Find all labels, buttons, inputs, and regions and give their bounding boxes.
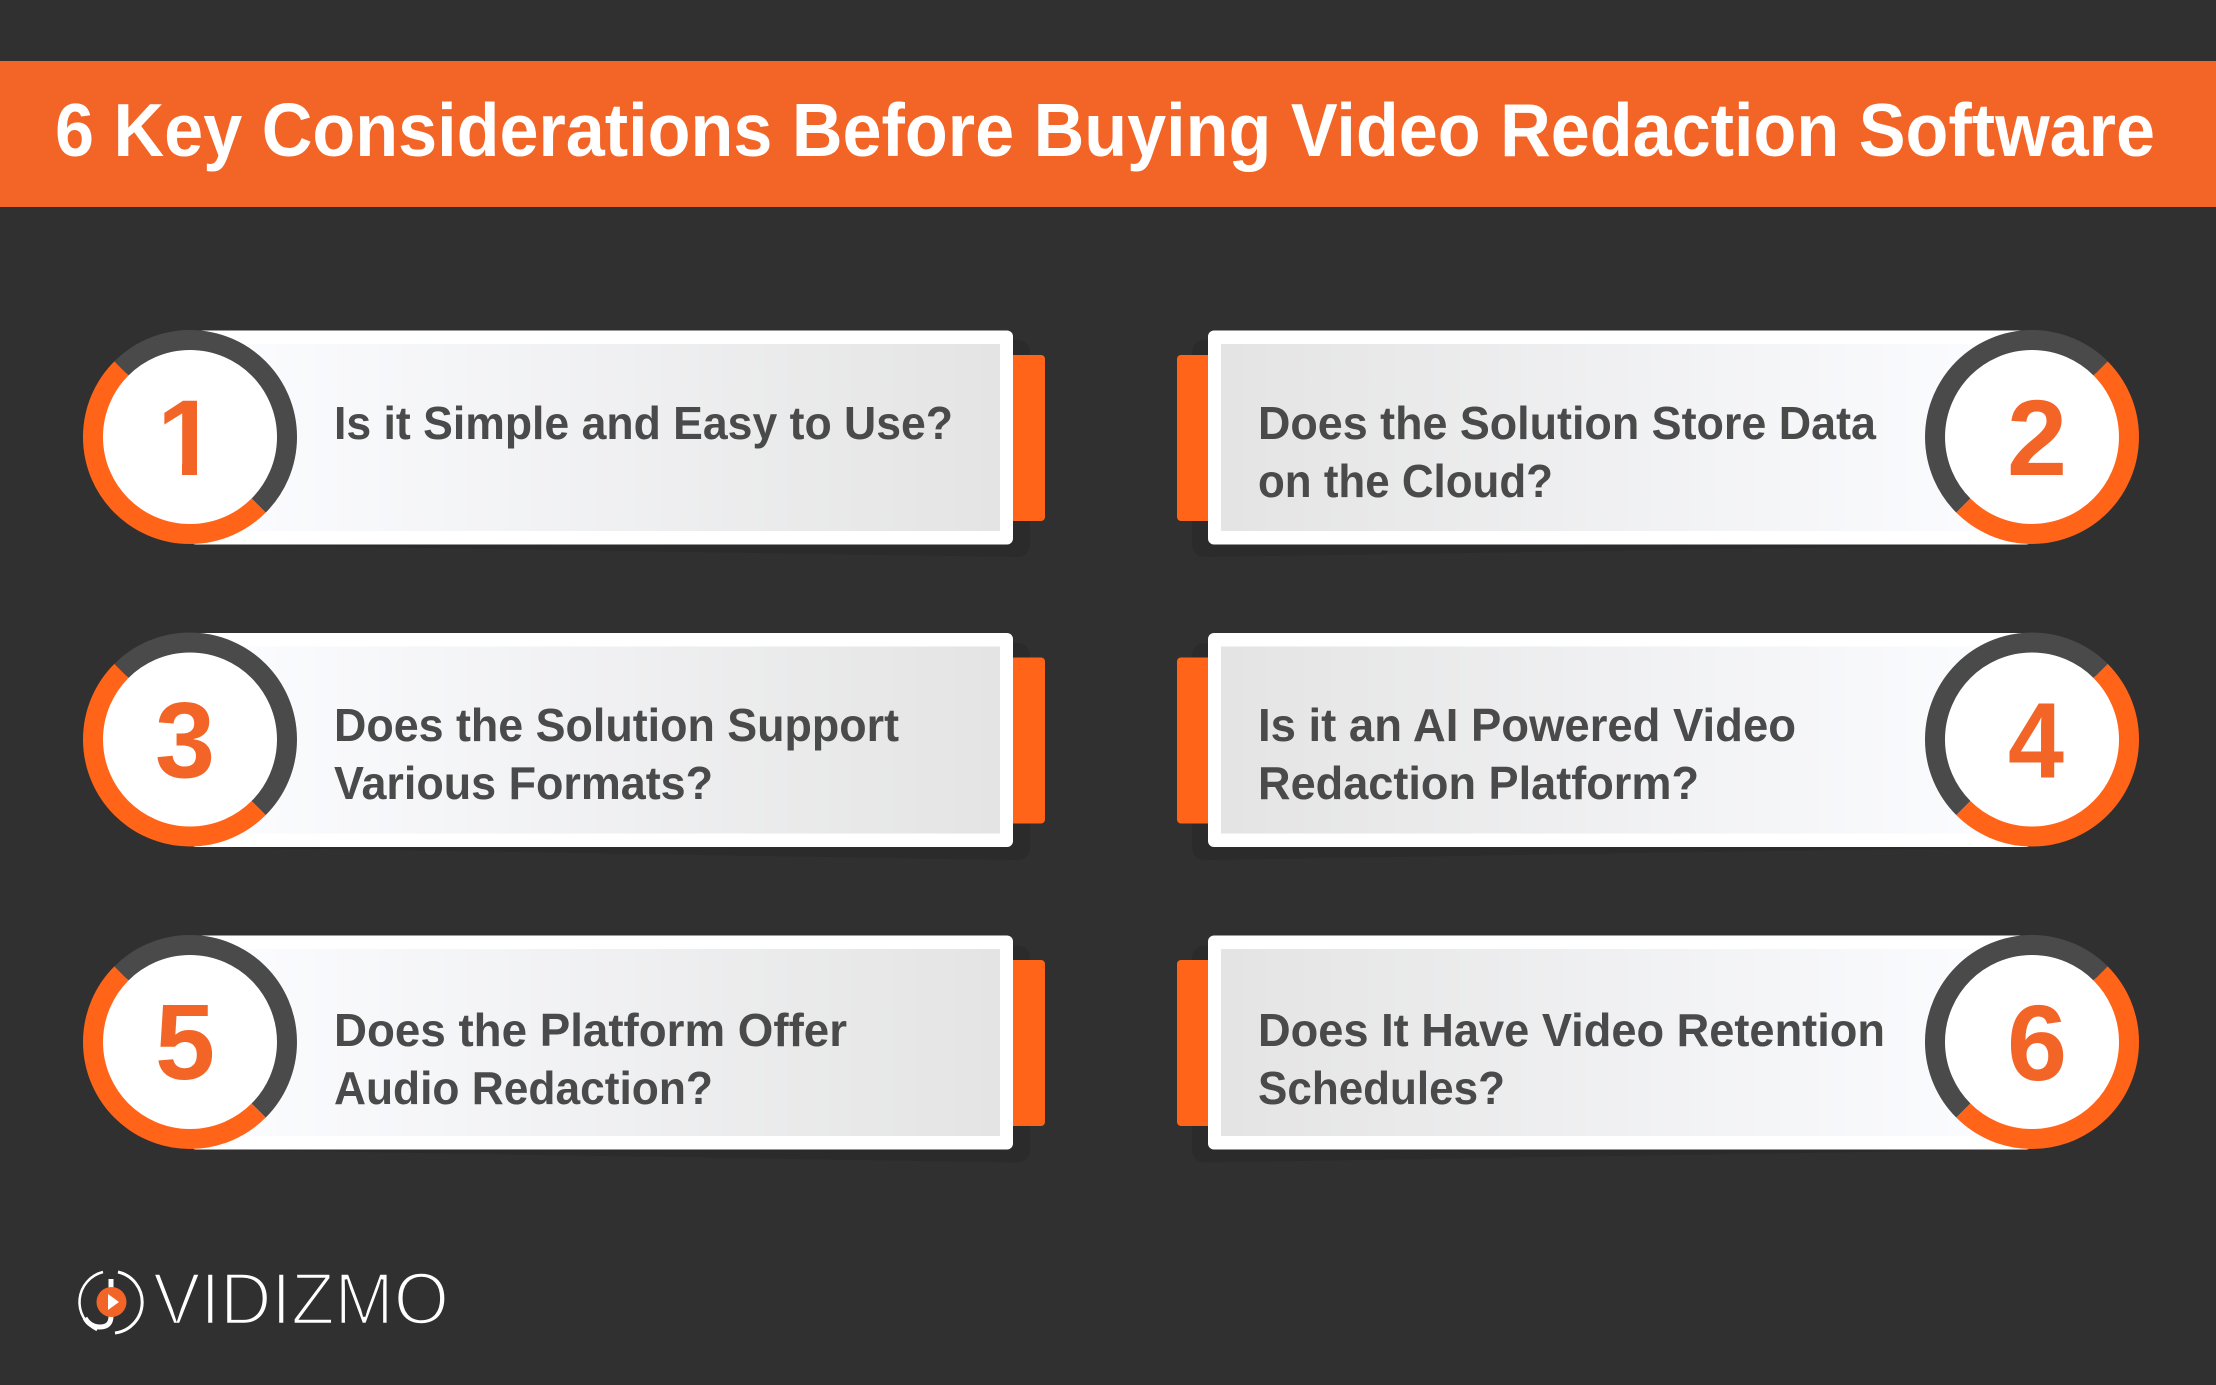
question 5 xyxy=(334,1004,847,1114)
question 5: Does the Platform Offer xyxy=(334,1004,847,1056)
question 2 xyxy=(1258,397,1876,507)
question 1: Is it Simple and Easy to Use? xyxy=(334,397,953,449)
number ring 2 xyxy=(1935,340,2129,534)
number ring 4: 4 xyxy=(2008,680,2064,800)
logo wordmark: VIDIZMO xyxy=(153,1259,449,1340)
card 2 xyxy=(1177,330,2129,557)
question 4 xyxy=(1258,699,1796,809)
number ring 1: 1 xyxy=(157,377,217,498)
number ring 6 xyxy=(1935,945,2129,1139)
question 2: Does the Solution Store Data xyxy=(1258,397,1876,449)
card 5 xyxy=(93,936,1045,1162)
question 6: Does It Have Video Retention xyxy=(1258,1004,1885,1056)
card 4 xyxy=(1177,633,2129,860)
number ring 4 xyxy=(1935,642,2129,837)
card 1 xyxy=(93,330,1045,557)
question 6 xyxy=(1258,1004,1885,1114)
logo xyxy=(79,1259,449,1340)
number ring 3: 3 xyxy=(155,680,215,800)
logo icon xyxy=(79,1272,142,1333)
number ring 6: 6 xyxy=(2007,982,2067,1103)
card 3 xyxy=(93,633,1045,860)
question 5: Audio Redaction? xyxy=(334,1062,713,1114)
number ring 5: 5 xyxy=(155,981,215,1102)
number ring 5 xyxy=(93,945,287,1139)
card 6 xyxy=(1177,936,2129,1162)
question 6: Schedules? xyxy=(1258,1062,1505,1114)
question 3: Various Formats? xyxy=(334,757,713,809)
number ring 2: 2 xyxy=(2007,377,2067,498)
number ring 3 xyxy=(93,643,287,836)
question 3 xyxy=(334,699,899,809)
question 4: Redaction Platform? xyxy=(1258,757,1699,809)
number ring 1 xyxy=(93,340,287,534)
question 4: Is it an AI Powered Video xyxy=(1258,699,1796,751)
question 3: Does the Solution Support xyxy=(334,699,899,751)
question 2: on the Cloud? xyxy=(1258,455,1553,507)
header banner xyxy=(0,61,2216,207)
